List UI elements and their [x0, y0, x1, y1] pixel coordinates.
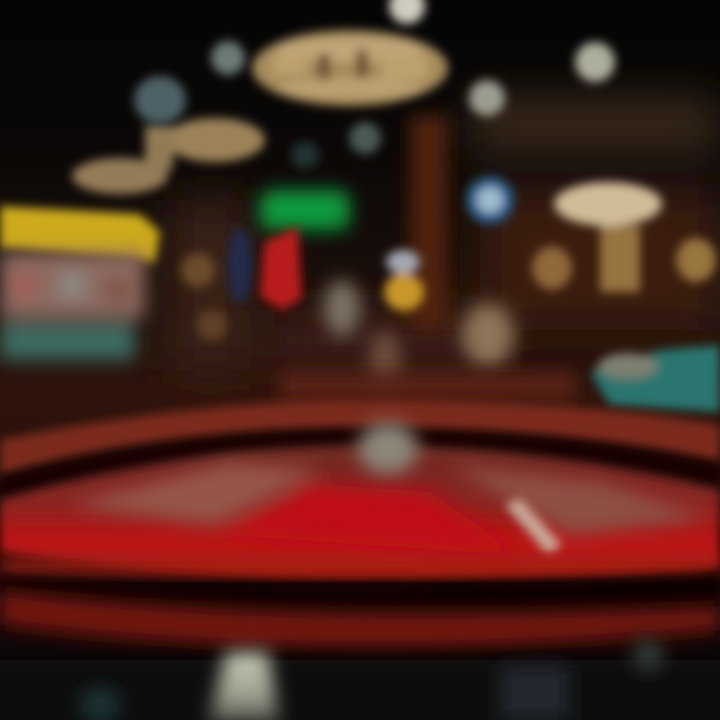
teal table on right [590, 345, 720, 412]
table front highlight [0, 558, 720, 574]
ceiling lights [134, 0, 615, 169]
left machine: screens [0, 252, 145, 360]
left machine: yellow header [0, 206, 160, 262]
ceiling and back wall [170, 100, 720, 370]
floor [0, 660, 720, 720]
red-brown column [410, 115, 448, 330]
roulette table: dark groove [0, 430, 720, 498]
yellow and white glass [384, 250, 424, 311]
table shadow band [0, 574, 720, 607]
roulette table: outer rim [0, 400, 720, 475]
roulette table: felt [0, 446, 720, 576]
right lamp [532, 182, 716, 292]
red drape [260, 226, 302, 310]
roulette table: patterned betting squares [70, 462, 710, 555]
centre pale figures [324, 280, 514, 390]
roulette wheel centre [358, 422, 418, 474]
blue light [466, 176, 514, 224]
white chip stripe [505, 498, 562, 555]
floor light reflections [80, 639, 664, 720]
green sign [260, 190, 350, 230]
red floor reflection [0, 590, 720, 647]
left stepped chandelier [72, 118, 265, 194]
main chandelier [252, 30, 448, 106]
left pillar and wall lights [181, 227, 252, 340]
background table edge [280, 372, 575, 400]
